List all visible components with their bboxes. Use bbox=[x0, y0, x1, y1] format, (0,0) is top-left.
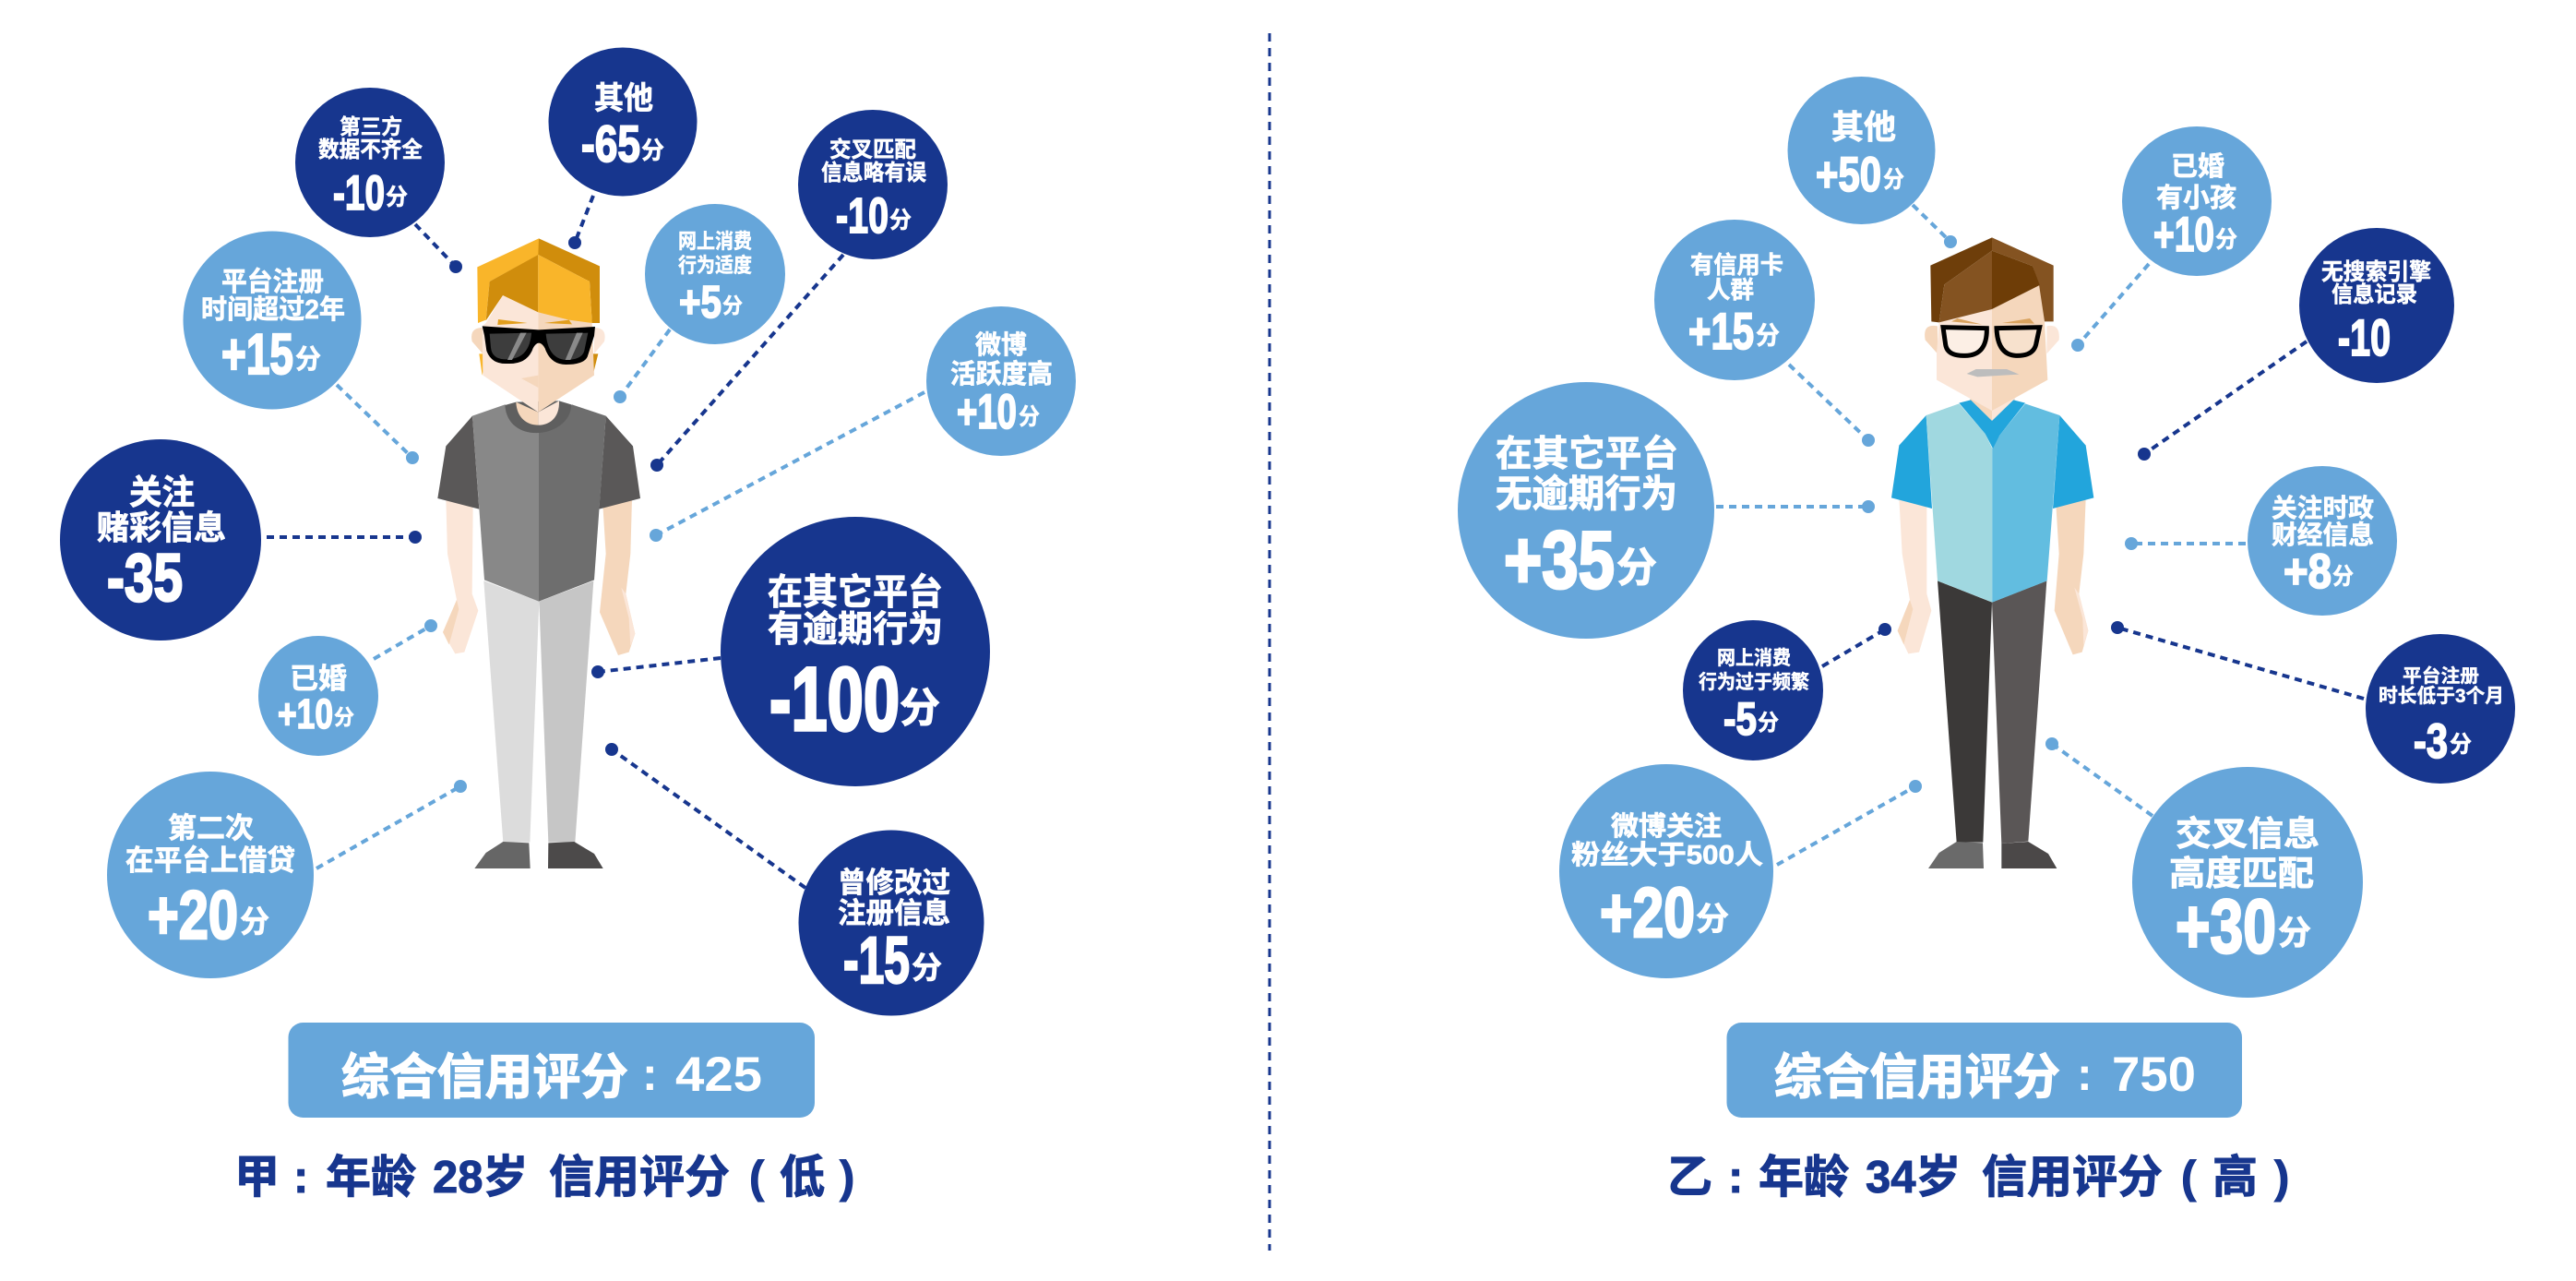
badge: 关注赌彩信息 -35: 赌彩信息 bbox=[97, 509, 226, 546]
panel: person A (甲) bbox=[60, 48, 1076, 1203]
badge: 微博活跃度高 +10分: 分 bbox=[1019, 404, 1040, 430]
score box: 综合信用评分 425: 425 bbox=[675, 1048, 762, 1102]
caption: 甲: 年龄 bbox=[326, 1153, 416, 1203]
badge: 网上消费行为适度 +5分: 分 bbox=[722, 293, 743, 317]
center divider bbox=[1268, 33, 1271, 1251]
badge: 网上消费行为过于频繁 -5分: 网上消费 bbox=[1717, 648, 1791, 669]
connector lines and dots A bbox=[267, 196, 924, 888]
badge: 已婚有小孩 +10分: 已婚 bbox=[2171, 151, 2224, 182]
badge: 无搜索引擎信息记录 -10: 信息记录 bbox=[2332, 282, 2417, 307]
badge: 微博活跃度高 +10分: +10 bbox=[957, 385, 1017, 439]
score box: 综合信用评分 425: : bbox=[642, 1048, 658, 1100]
badge: 第三方数据不齐全 -10分: 第三方 bbox=[340, 114, 402, 138]
badge: 曾修改过注册信息 -15分: 曾修改过 bbox=[838, 867, 950, 899]
badge: 网上消费行为适度 +5分: 网上消费 bbox=[678, 230, 752, 253]
badge: 网上消费行为过于频繁 -5分: 分 bbox=[1758, 711, 1779, 736]
badge: 已婚有小孩 +10分 bbox=[2122, 126, 2272, 276]
badge: 有信用卡人群 +15分: 有信用卡 bbox=[1690, 251, 1783, 279]
badge: 已婚 +10分: 已婚 bbox=[290, 663, 347, 695]
caption: 甲: ( bbox=[749, 1153, 765, 1203]
badge: 关注时政财经信息 +8分: 分 bbox=[2332, 564, 2354, 590]
badge: 微博活跃度高 +10分 bbox=[926, 306, 1076, 456]
caption: 乙: ) bbox=[2274, 1153, 2289, 1203]
badge: 曾修改过注册信息 -15分 bbox=[799, 831, 984, 1015]
badge: 在其它平台有逾期行为 -100分: 分 bbox=[900, 686, 940, 731]
caption: 乙: 信用评分 bbox=[1982, 1153, 2163, 1203]
badge: 微博关注粉丝大于500人 +20分: 分 bbox=[1696, 902, 1729, 938]
badge: 平台注册时间超过2年 +15分 bbox=[183, 231, 362, 410]
figure: man with glasses and vest bbox=[1891, 237, 2093, 868]
score box: 综合信用评分 750: 750 bbox=[2112, 1048, 2196, 1102]
connector lines and dots B bbox=[1716, 205, 2364, 865]
badge: 在其它平台有逾期行为 -100分 bbox=[721, 517, 990, 786]
badge: 交叉匹配信息略有误 -10分: -10 bbox=[836, 188, 888, 244]
badge: 有信用卡人群 +15分: +15 bbox=[1688, 302, 1754, 360]
score box: 综合信用评分 425: 综合信用评分 bbox=[341, 1050, 628, 1105]
badge: 其他 -65分: -65 bbox=[581, 114, 640, 173]
score box: 综合信用评分 750 bbox=[1727, 1023, 2242, 1118]
badge: 微博关注粉丝大于500人 +20分: +20 bbox=[1600, 874, 1695, 952]
badge: 交叉匹配信息略有误 -10分: 交叉匹配 bbox=[829, 137, 916, 162]
badge: 关注赌彩信息 -35: 关注 bbox=[129, 473, 195, 511]
caption: 甲: 信用评分 bbox=[549, 1153, 730, 1203]
badge: 在其它平台无逾期行为 +35分: 无逾期行为 bbox=[1496, 473, 1677, 515]
badge: 网上消费行为适度 +5分: 行为适度 bbox=[678, 254, 752, 277]
badge: 交叉匹配信息略有误 -10分: 分 bbox=[889, 208, 912, 233]
badge: 其他 +50分: 分 bbox=[1883, 167, 1904, 193]
badge: 无搜索引擎信息记录 -10 bbox=[2299, 228, 2454, 383]
caption: 乙: 乙 bbox=[1667, 1153, 1712, 1203]
badge: 微博关注粉丝大于500人 +20分: 微博关注 bbox=[1611, 811, 1722, 842]
badge: 已婚 +10分 bbox=[258, 636, 378, 756]
badge: 在其它平台无逾期行为 +35分: +35 bbox=[1504, 514, 1615, 605]
badge: 在其它平台有逾期行为 -100分: -100 bbox=[769, 649, 900, 749]
badge: 微博活跃度高 +10分: 活跃度高 bbox=[950, 359, 1053, 389]
badge: 已婚 +10分: 分 bbox=[334, 705, 354, 729]
badge: 无搜索引擎信息记录 -10: 无搜索引擎 bbox=[2321, 259, 2431, 285]
badge: 平台注册时间超过2年 +15分: 时间超过2年 bbox=[201, 294, 345, 325]
badge: 关注时政财经信息 +8分: 财经信息 bbox=[2272, 521, 2374, 549]
score box: 综合信用评分 750: : bbox=[2077, 1048, 2093, 1100]
caption: 乙: ( bbox=[2181, 1153, 2197, 1203]
badge: 曾修改过注册信息 -15分: 分 bbox=[912, 951, 942, 985]
badge: 其他 -65分 bbox=[548, 48, 698, 196]
badge: 网上消费行为适度 +5分: +5 bbox=[679, 278, 722, 328]
badge: 关注时政财经信息 +8分 bbox=[2248, 466, 2397, 616]
badge: 关注时政财经信息 +8分: +8 bbox=[2284, 545, 2332, 599]
badge: 第三方数据不齐全 -10分: 分 bbox=[386, 185, 408, 210]
badge: 平台注册时长低于3个月 -3分 bbox=[2366, 634, 2515, 784]
caption: 乙: 34岁 bbox=[1866, 1153, 1962, 1203]
badge: 网上消费行为过于频繁 -5分 bbox=[1683, 620, 1823, 760]
badge: 平台注册时间超过2年 +15分: 分 bbox=[295, 344, 321, 375]
badge: 交叉信息高度匹配 +30分: 高度匹配 bbox=[2169, 855, 2314, 892]
caption: 甲: : bbox=[293, 1153, 308, 1203]
badge: 微博活跃度高 +10分: 微博 bbox=[975, 330, 1027, 359]
badge: 网上消费行为适度 +5分 bbox=[645, 204, 785, 344]
badge: 在其它平台无逾期行为 +35分: 分 bbox=[1616, 545, 1657, 591]
badge: 在其它平台有逾期行为 -100分: 有逾期行为 bbox=[768, 610, 943, 650]
caption: 乙: 高 bbox=[2212, 1153, 2258, 1203]
badge: 微博关注粉丝大于500人 +20分: 粉丝大于500人 bbox=[1571, 840, 1763, 870]
badge: 其他 -65分: 分 bbox=[641, 137, 664, 164]
badge: 无搜索引擎信息记录 -10: -10 bbox=[2338, 308, 2391, 366]
badge: 第二次在平台上借贷 +20分: 分 bbox=[240, 904, 269, 939]
badge: 其他 +50分: 其他 bbox=[1831, 108, 1896, 146]
badge: 平台注册时间超过2年 +15分: 平台注册 bbox=[221, 266, 324, 297]
badge: 网上消费行为过于频繁 -5分: -5 bbox=[1723, 693, 1757, 745]
badge: 有信用卡人群 +15分 bbox=[1654, 220, 1815, 380]
badge: 平台注册时长低于3个月 -3分: 平台注册 bbox=[2403, 664, 2479, 687]
badge: 第二次在平台上借贷 +20分: 第二次 bbox=[168, 812, 254, 844]
badge: 交叉信息高度匹配 +30分 bbox=[2132, 767, 2363, 998]
caption: 甲: 28岁 bbox=[433, 1153, 529, 1203]
badge: 交叉信息高度匹配 +30分: 交叉信息 bbox=[2176, 815, 2320, 853]
caption: 甲: ) bbox=[840, 1153, 854, 1203]
badge: 曾修改过注册信息 -15分: -15 bbox=[843, 925, 910, 998]
badge: 交叉信息高度匹配 +30分: 分 bbox=[2278, 914, 2311, 952]
figure: young man with sunglasses bbox=[437, 238, 640, 868]
badge: 网上消费行为过于频繁 -5分: 行为过于频繁 bbox=[1699, 672, 1809, 693]
caption: 甲: 低 bbox=[780, 1153, 825, 1203]
caption: 乙: : bbox=[1728, 1153, 1743, 1203]
score box: 综合信用评分 750: 综合信用评分 bbox=[1774, 1050, 2060, 1105]
score box: 综合信用评分 425 bbox=[288, 1023, 815, 1118]
badge: 第二次在平台上借贷 +20分: 在平台上借贷 bbox=[125, 844, 295, 877]
panel: person B (乙) bbox=[1458, 77, 2515, 1203]
badge: 已婚有小孩 +10分: +10 bbox=[2153, 208, 2214, 262]
badge: 交叉匹配信息略有误 -10分 bbox=[798, 110, 948, 259]
badge: 关注时政财经信息 +8分: 关注时政 bbox=[2272, 494, 2374, 522]
badge: 交叉匹配信息略有误 -10分: 信息略有误 bbox=[821, 161, 926, 186]
badge: 微博关注粉丝大于500人 +20分 bbox=[1559, 764, 1773, 978]
badge: 有信用卡人群 +15分: 人群 bbox=[1707, 276, 1754, 304]
badge: 其他 -65分: 其他 bbox=[594, 81, 653, 116]
badge: 第三方数据不齐全 -10分 bbox=[295, 88, 445, 237]
badge: 在其它平台有逾期行为 -100分: 在其它平台 bbox=[768, 573, 943, 613]
badge: 平台注册时间超过2年 +15分: +15 bbox=[221, 323, 293, 387]
badge: 在其它平台无逾期行为 +35分: 在其它平台 bbox=[1496, 435, 1678, 474]
badge: 在其它平台无逾期行为 +35分 bbox=[1458, 382, 1714, 639]
badge: 平台注册时长低于3个月 -3分: -3 bbox=[2414, 714, 2448, 769]
badge: 第二次在平台上借贷 +20分 bbox=[107, 772, 314, 978]
badge: 已婚 +10分: +10 bbox=[278, 690, 333, 737]
badge: 曾修改过注册信息 -15分: 注册信息 bbox=[838, 897, 950, 929]
badge: 第三方数据不齐全 -10分: -10 bbox=[333, 166, 385, 221]
badge: 关注赌彩信息 -35: -35 bbox=[107, 541, 183, 616]
caption: 甲: 甲 bbox=[234, 1153, 280, 1203]
badge: 第三方数据不齐全 -10分: 数据不齐全 bbox=[318, 138, 423, 162]
badge: 已婚有小孩 +10分: 分 bbox=[2215, 227, 2237, 253]
badge: 其他 +50分: +50 bbox=[1816, 148, 1881, 202]
badge: 平台注册时长低于3个月 -3分: 分 bbox=[2450, 732, 2472, 758]
badge: 关注赌彩信息 -35 bbox=[60, 439, 261, 640]
badge: 平台注册时长低于3个月 -3分: 时长低于3个月 bbox=[2379, 686, 2504, 707]
badge: 有信用卡人群 +15分: 分 bbox=[1756, 322, 1780, 350]
caption: 乙: 年龄 bbox=[1759, 1153, 1849, 1203]
badge: 其他 +50分 bbox=[1788, 77, 1936, 224]
badge: 交叉信息高度匹配 +30分: +30 bbox=[2176, 883, 2276, 969]
badge: 已婚有小孩 +10分: 有小孩 bbox=[2156, 183, 2236, 213]
badge: 第二次在平台上借贷 +20分: +20 bbox=[148, 877, 238, 953]
